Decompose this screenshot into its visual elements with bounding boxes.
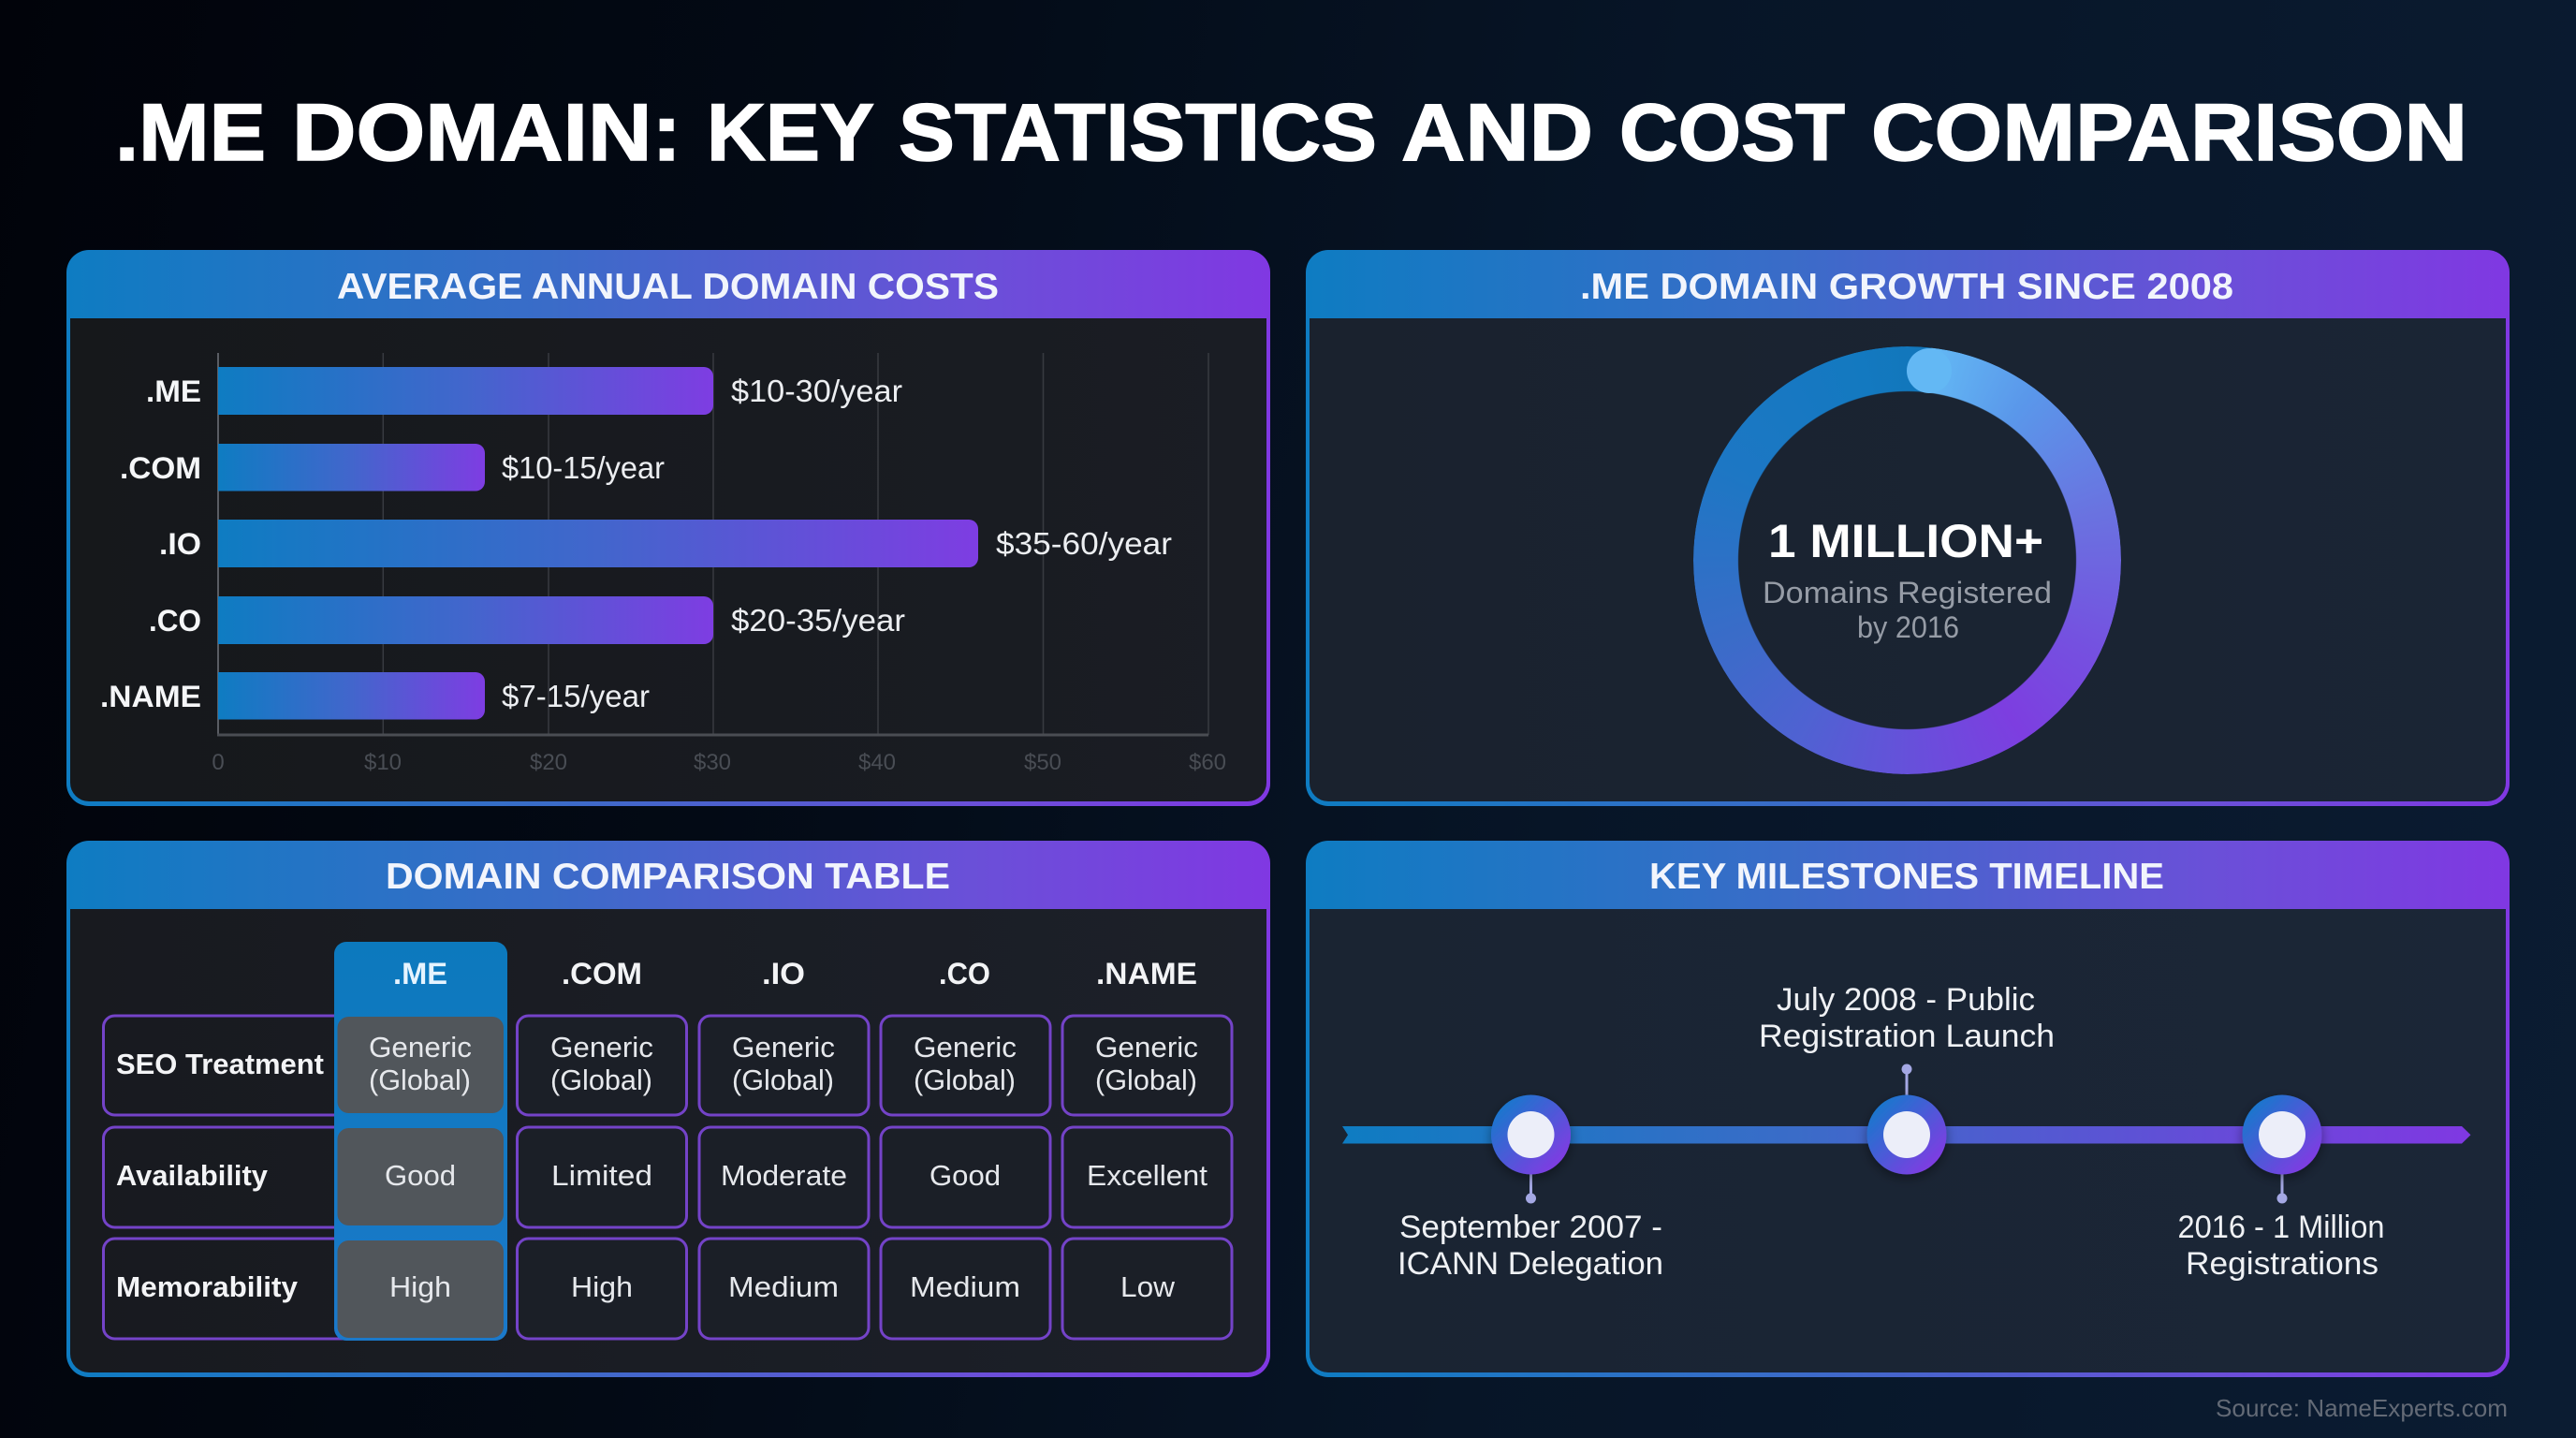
- column headers: [393, 957, 1197, 990]
- row: SEO Treatment: (Global): [1095, 1064, 1197, 1096]
- row labels: [103, 1016, 356, 1339]
- donut centre text: 1 MILLION+: [1768, 515, 2043, 567]
- row: Memorability: High: [571, 1270, 633, 1303]
- row: Availability: Good: [929, 1159, 1001, 1192]
- row: SEO Treatment: (Global): [732, 1064, 834, 1096]
- timeline bar: [1342, 1126, 2471, 1144]
- axis labels: $30: [694, 750, 731, 775]
- axis labels: $20: [530, 750, 567, 775]
- bar: .COM: .COM: [120, 451, 201, 485]
- row: SEO Treatment: [116, 1031, 1198, 1096]
- data cell borders: [517, 1016, 1232, 1339]
- axis labels: $50: [1024, 750, 1061, 775]
- row: Memorability: High: [389, 1270, 451, 1303]
- axis labels: $60: [1189, 750, 1226, 775]
- row: SEO Treatment: Generic: [369, 1031, 472, 1064]
- row: SEO Treatment: Generic: [732, 1031, 835, 1064]
- bar: .IO: $35-60/year: [996, 526, 1172, 561]
- milestone: September 2007: ICANN Delegation: [1398, 1246, 1663, 1282]
- row: SEO Treatment: Generic: [914, 1031, 1017, 1064]
- donut centre text: [1763, 515, 2052, 644]
- bar: .NAME: [100, 672, 650, 719]
- panel: domain comparison table: [66, 841, 1270, 1377]
- row: SEO Treatment: Generic: [1095, 1031, 1198, 1064]
- heading: average annual domain costs: AVERAGE ANNUAL DOMAIN COSTS: [337, 267, 999, 307]
- column headers: .IO: [762, 957, 805, 990]
- row: Memorability: [116, 1270, 1176, 1303]
- milestone: July 2008: Registration Launch: [1759, 1019, 2055, 1054]
- comparison table: [103, 942, 1232, 1341]
- row: SEO Treatment: (Global): [914, 1064, 1016, 1096]
- axis labels: $40: [858, 750, 896, 775]
- milestone: September 2007: September 2007 -: [1399, 1210, 1662, 1245]
- source note: Source: NameExperts.com: [2216, 1394, 2508, 1422]
- bar chart: domain costs: [100, 353, 1226, 775]
- column headers: .NAME: [1096, 957, 1197, 990]
- bar: .CO: $20-35/year: [731, 603, 905, 638]
- row: SEO Treatment: (Global): [369, 1064, 471, 1096]
- column headers: .ME: [393, 957, 447, 990]
- row: Availability: Limited: [551, 1159, 652, 1192]
- column headers: .CO: [939, 957, 990, 990]
- row: Memorability: Medium: [728, 1270, 839, 1303]
- milestone: September 2007: [1398, 1095, 1663, 1282]
- row: Availability: Availability: [116, 1159, 269, 1192]
- title: [115, 89, 2467, 173]
- row: Availability: Good: [385, 1159, 456, 1192]
- bar: .IO: .IO: [159, 527, 201, 561]
- bar: .ME: .ME: [146, 374, 201, 408]
- bar: .CO: [149, 596, 905, 644]
- axis labels: $10: [364, 750, 402, 775]
- row: Memorability: Memorability: [116, 1270, 299, 1303]
- heading: comparison table: DOMAIN COMPARISON TABLE: [386, 857, 950, 897]
- bar: .NAME: $7-15/year: [502, 679, 650, 713]
- milestone: July 2008: [1759, 982, 2055, 1174]
- row: SEO Treatment: Generic: [550, 1031, 653, 1064]
- row: SEO Treatment: (Global): [550, 1064, 652, 1096]
- bar: .NAME: .NAME: [100, 680, 201, 713]
- bar: .COM: $10-15/year: [502, 450, 665, 485]
- milestone: July 2008: July 2008 - Public: [1777, 982, 2035, 1018]
- row: Availability: Excellent: [1087, 1159, 1208, 1192]
- bar: .ME: $10-30/year: [731, 374, 902, 408]
- row: Availability: Moderate: [721, 1159, 847, 1192]
- axis labels: 0: [212, 750, 225, 775]
- heading: growth since 2008: .ME DOMAIN GROWTH SINCE 2008: [1580, 267, 2233, 307]
- column headers: .COM: [562, 957, 642, 990]
- panel: average annual domain costs: [66, 250, 1270, 806]
- milestone: 2016: Registrations: [2186, 1246, 2378, 1282]
- donut centre text: Domains Registered: [1763, 576, 2052, 609]
- milestone: 2016: [2177, 1095, 2385, 1282]
- row: SEO Treatment: SEO Treatment: [116, 1048, 324, 1080]
- donut ring: [1693, 346, 2121, 774]
- bar: .CO: .CO: [149, 604, 201, 638]
- milestone: 2016: 2016 - 1 Million: [2177, 1210, 2385, 1245]
- bar: .ME: [146, 367, 902, 415]
- donut progress cap: [1907, 348, 1952, 393]
- bar: .IO: [159, 520, 1172, 567]
- row: Availability: [116, 1159, 1208, 1192]
- row: Memorability: Low: [1120, 1270, 1176, 1303]
- row: Memorability: Medium: [910, 1270, 1020, 1303]
- heading: milestones timeline: KEY MILESTONES TIMELINE: [1649, 857, 2164, 897]
- highlighted .ME column: [334, 942, 507, 1341]
- panel: domain growth since 2008: [1306, 250, 2510, 806]
- donut centre text: by 2016: [1857, 610, 1959, 644]
- axis labels: [212, 750, 1226, 775]
- bar: .COM: [120, 444, 665, 491]
- panel: key milestones timeline: [1306, 841, 2510, 1377]
